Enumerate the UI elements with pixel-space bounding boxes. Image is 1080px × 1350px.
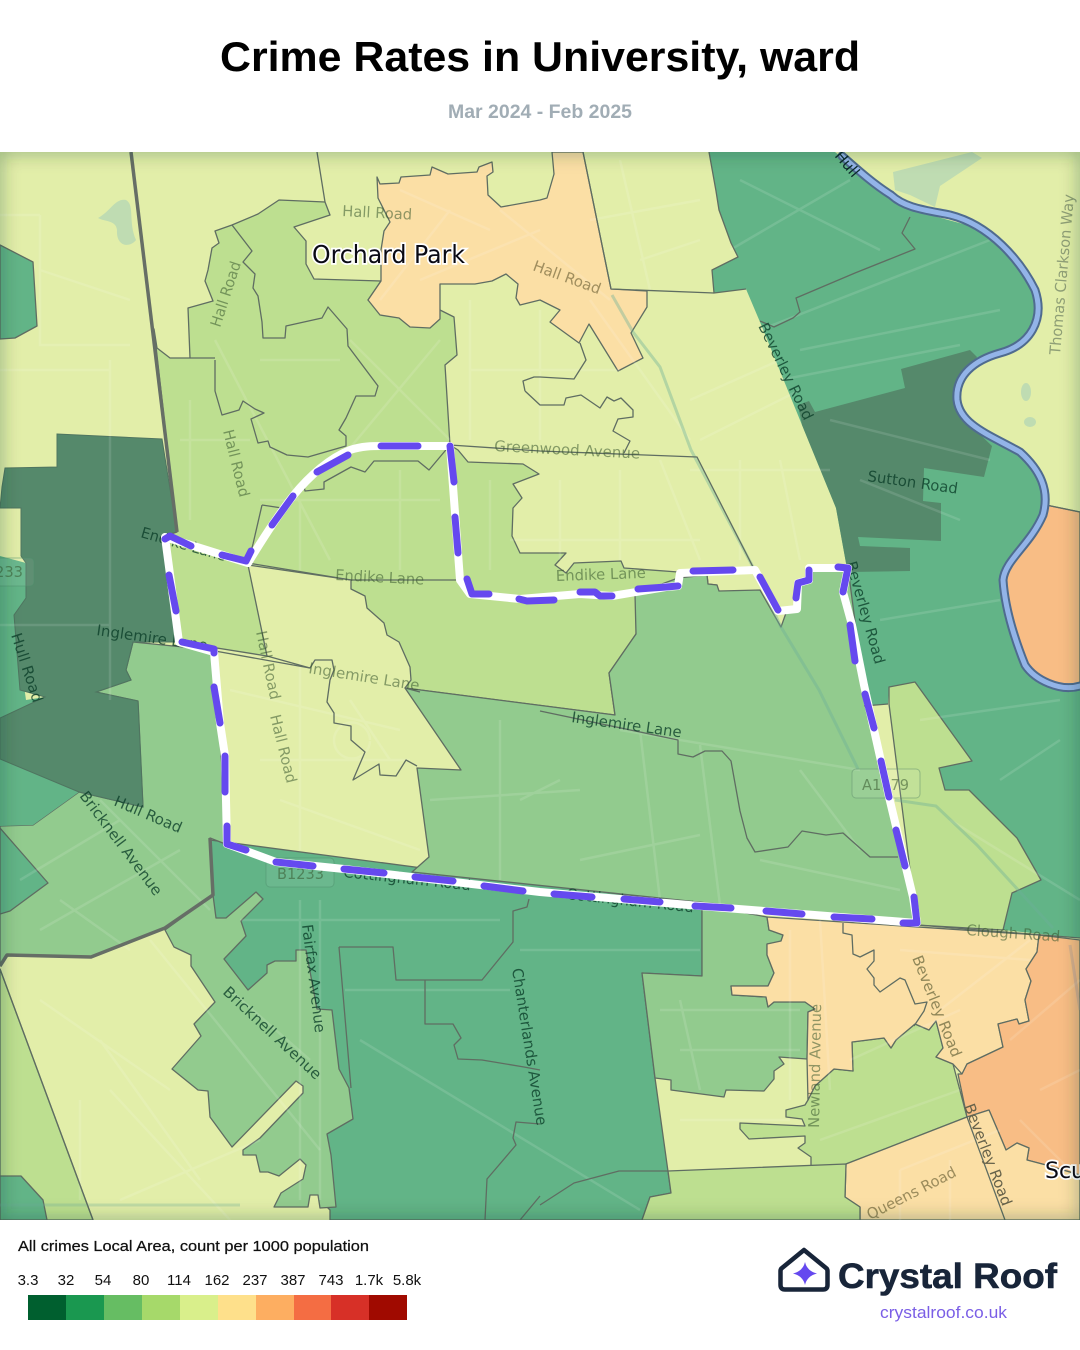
legend values: 54 [95, 1272, 111, 1289]
region: southeast deep orange [958, 935, 1080, 1175]
road labels [7, 147, 1078, 1224]
subtitle: date range: Mar 2024 - Feb 2025 [448, 102, 632, 123]
region: northern green [154, 200, 717, 715]
legend values: 387 [280, 1272, 306, 1289]
road labels: Hull [831, 147, 863, 181]
region: southwest corner [0, 969, 93, 1220]
road labels: Hall Road [219, 428, 253, 499]
street texture [0, 160, 1080, 1220]
drains and paths [0, 295, 1080, 1205]
region: dark green Sutton [798, 350, 992, 572]
place label: Orchard Park: Orchard Park [312, 240, 465, 269]
region: south light green [642, 1164, 860, 1220]
road labels: Cottingham Road [343, 863, 472, 894]
road labels: Hull Road [111, 792, 185, 837]
icon: house with star [780, 1250, 828, 1290]
road labels: Hall Road [207, 259, 245, 329]
legend [18, 1238, 422, 1320]
road labels: Queens Road [864, 1163, 959, 1224]
legend values: 1.7k [355, 1272, 384, 1289]
legend values: 80 [133, 1272, 149, 1289]
road labels: Beverley Road [842, 559, 889, 666]
legend values: 32 [58, 1272, 74, 1289]
road labels: Endike Lane [556, 564, 646, 585]
panel: choropleth map [0, 147, 1080, 1224]
region: far southwest corner [0, 1176, 47, 1220]
road labels: Beverley Road [754, 320, 817, 423]
region: orange east of river [1003, 505, 1080, 687]
road labels: Inglemire Lane [570, 708, 683, 741]
legend values: 3.3 [18, 1272, 38, 1289]
road labels: Thomas Clarkson Way [1046, 193, 1078, 356]
title: Crime Rates in University, ward [220, 33, 860, 80]
region: west mid green [0, 642, 228, 966]
region: east light green [889, 682, 1041, 930]
region: east green [709, 152, 1080, 938]
region: Queens Road orange [845, 1110, 1080, 1220]
region: southern green area [205, 840, 702, 1220]
road labels: Bricknell Avenue [76, 788, 166, 899]
logo wordmark: Crystal Roof [838, 1257, 1057, 1296]
legend values: 743 [318, 1272, 344, 1289]
road labels: Endike Lane [335, 566, 425, 589]
legend values: 162 [204, 1272, 230, 1289]
ward boundary: University [165, 446, 917, 923]
road labels: Inglemire Lane [307, 659, 421, 694]
region: Newland light green [740, 1021, 967, 1169]
road labels: Hall Road [252, 629, 284, 701]
water: ponds [98, 152, 1036, 427]
road labels: Fairfax Avenue [298, 923, 329, 1034]
map edge vignette [0, 146, 1080, 1226]
road labels: Greenwood Avenue [494, 437, 641, 463]
region: southwest mid green [165, 892, 353, 1208]
legend values: 114 [167, 1272, 191, 1289]
region: Beverley orange [731, 917, 1039, 1100]
boundary lines [0, 152, 1080, 1220]
road labels: Inglemire Lane [95, 621, 209, 655]
road labels: Clough Road [966, 921, 1061, 946]
legend colour scale [28, 1295, 407, 1320]
road labels: Sutton Road [866, 467, 959, 498]
road labels: Cottingham Road [566, 885, 695, 916]
legend values: 5.8k [393, 1272, 422, 1289]
legend values [18, 1272, 422, 1289]
road labels: Bricknell Avenue [219, 983, 325, 1083]
river Hull [842, 156, 1080, 688]
road labels: Hull Road [7, 631, 47, 705]
road labels: Hall Road [342, 202, 413, 224]
road labels: Hall Road [531, 257, 604, 298]
road labels: Beverley Road [960, 1101, 1016, 1208]
legend values: 237 [242, 1272, 268, 1289]
region: west patches [0, 245, 79, 914]
road badges: B1233 [277, 865, 324, 883]
road labels: Hall Road [266, 713, 301, 785]
road badges: A1079 [862, 776, 909, 794]
road labels: Newland Avenue [805, 1004, 825, 1128]
road labels: Endike Lane [139, 524, 228, 565]
region: south-central mid green [642, 905, 815, 1097]
region: university central mid green [405, 568, 917, 925]
logo: Crystal Roof [780, 1250, 1057, 1322]
region: dark green west [0, 434, 177, 807]
legend title: All crimes Local Area, count per 1000 population [18, 1238, 369, 1255]
road labels: Beverley Road [908, 953, 965, 1060]
road labels: Chanterlands Avenue [508, 967, 551, 1127]
region: Orchard Park orange [368, 152, 647, 371]
road badges [0, 558, 920, 887]
website link: crystalroof.co.uk [880, 1304, 1008, 1322]
